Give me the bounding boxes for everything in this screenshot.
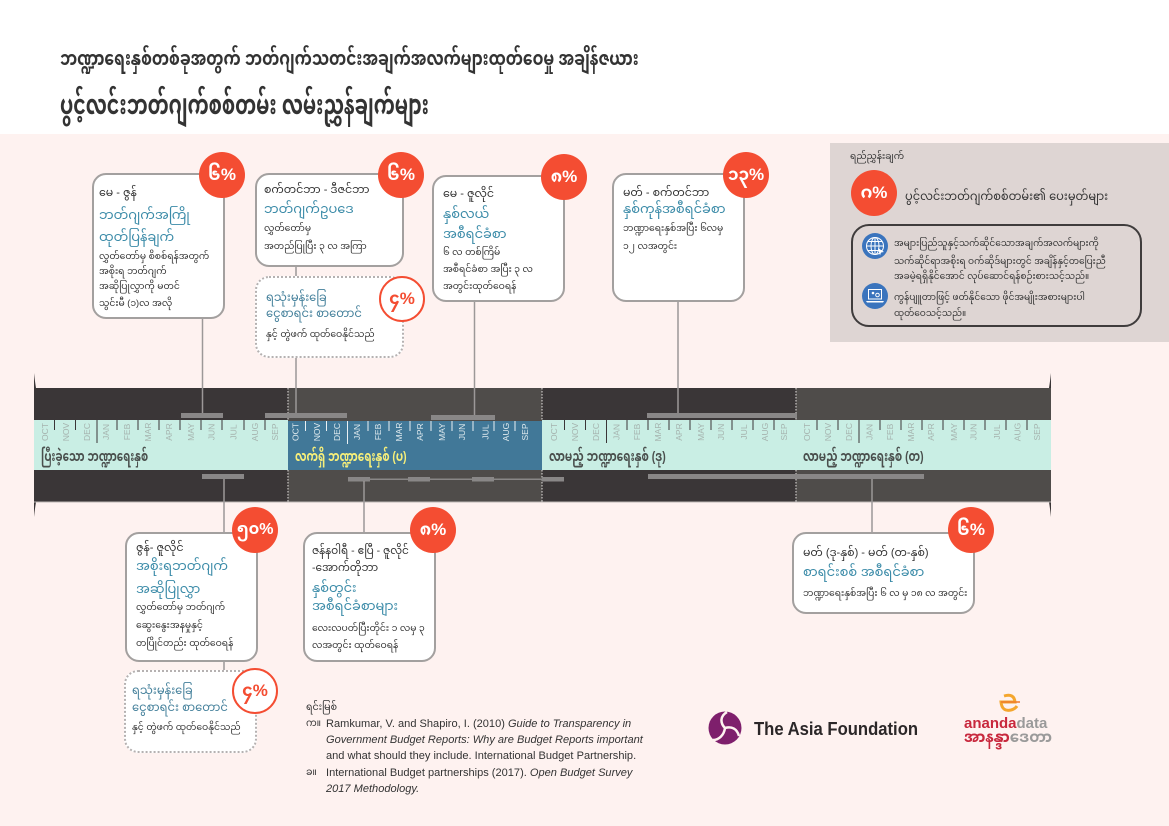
month labels: next year: JUN [716, 424, 726, 440]
card 4 heading: နှစ်ကုန်အစီရင်ခံစာ [623, 201, 726, 216]
card 6 date: ဇန်နဝါရီ - ဧပြီ - ဇူလိုင် [312, 545, 409, 557]
month labels: previous year: DEC [82, 423, 92, 441]
title [60, 45, 639, 128]
card 5 heading: အဆိုပြုလွှာ [136, 581, 200, 596]
card 3 heading [443, 205, 507, 244]
card 1 body [99, 250, 209, 310]
dashed card 1 heading [266, 289, 362, 322]
source two [306, 767, 633, 795]
month labels: following year: JUL [992, 424, 1002, 440]
card 2 body: လွှတ်တော်မှ [264, 223, 311, 233]
legend score label: ပွင့်လင်းဘတ်ဂျက်စစ်တမ်း၏ ပေးမှတ်များ [905, 191, 1108, 203]
month labels: following year: MAY [949, 423, 959, 441]
month labels: previous year: JAN [101, 424, 111, 440]
legend note one: အခမဲ့ရရှိနိုင်အောင် လုပ်ဆောင်ရန်စဉ်းစားသင့်သည်။ [894, 271, 1089, 281]
card: budget law [255, 173, 404, 267]
legend score circle: ဂ% [861, 183, 887, 202]
dashed card 2 body: နှင့် တွဲဖက် ထုတ်ဝေနိုင်သည် [132, 722, 241, 732]
card 4 body: ၁၂ လအတွင်း [623, 241, 677, 251]
title: ဘဏ္ဍာရေးနှစ်တစ်ခုအတွက် ဘတ်ဂျက်သတင်းအချက်အလက်များထုတ်ဝေမှု အချိန်ဇယား [60, 48, 639, 70]
month labels: current year [291, 422, 530, 441]
logo: The Asia Foundation [708, 712, 918, 744]
score: mid-year report: ၈% [551, 167, 577, 186]
month labels: next year: JAN [612, 424, 622, 440]
score: budget law [378, 152, 424, 198]
month labels: following year: MAR [906, 423, 916, 441]
card 6 heading: နှစ်တွင်း [312, 580, 357, 595]
next fiscal year band [542, 420, 796, 470]
month labels: next year: FEB [632, 423, 642, 440]
month labels: following year [802, 422, 1042, 441]
score: executive budget proposal: ၅၀% [236, 521, 274, 538]
card 4 date: မတ် - စက်တင်ဘာ [623, 187, 709, 199]
month labels: previous year: AUG [250, 423, 260, 441]
logo swirl [999, 694, 1020, 712]
month labels: following year: AUG [1012, 423, 1022, 441]
score: budget law: ၆% [387, 165, 415, 184]
year labels: လာမည့် ဘဏ္ဍာရေးနှစ် (တ) [803, 445, 924, 469]
score: in-year reports [410, 507, 456, 553]
month labels: current year: FEB [373, 423, 383, 440]
card: year-end report [612, 173, 745, 302]
month labels: current year: JAN [352, 424, 362, 440]
score: pre-budget statement: ၆% [208, 165, 236, 184]
card 6 heading: အစီရင်ခံစာများ [312, 598, 398, 613]
dashed card 1 heading: ငွေစာရင်း စာတောင် [266, 308, 362, 320]
year labels: လာမည့် ဘဏ္ဍာရေးနှစ် (ဒု) [549, 445, 666, 469]
dashed card 2 heading [132, 682, 228, 716]
card 5 date: ဇွန်- ဇူလိုင် [136, 542, 184, 554]
month labels: previous year: MAR [143, 423, 153, 441]
card 3 body: အစီရင်ခံစာ အပြီး ၃ လ [443, 264, 533, 274]
month labels: current year: JUN [457, 424, 467, 440]
source two: 2017 Methodology. [326, 783, 419, 795]
month labels: previous year: MAY [186, 423, 196, 441]
month labels: following year: FEB [885, 423, 895, 440]
card 1 heading [99, 206, 190, 247]
legend note two: ကွန်ပျူတာဖြင့် ဖတ်နိုင်သော ဖိုင်အမျိုးအစားများပါ [894, 292, 1085, 302]
logo wordmark [964, 715, 1052, 750]
card 1 body: သွင်းမီ (၁)လ အလို [99, 298, 172, 308]
score: estimates with budget law [379, 276, 425, 322]
card 5 body: ဆွေးနွေးအနမှုနှင့် [136, 620, 203, 630]
legend score circle [851, 170, 897, 216]
card 3 body [443, 246, 533, 294]
month labels: current year: MAR [394, 423, 404, 441]
score: audit report: ၆% [957, 520, 985, 539]
card 7 date: မတ် (ဒု-နှစ်) - မတ် (တ-နှစ်) [803, 547, 929, 559]
logo: ananda data [964, 694, 1052, 750]
month labels: next year: OCT [549, 423, 559, 441]
legend note one: သက်ဆိုင်ရာအစိုးရ ဝက်ဆိုဒ်များတွင် အချိန်နှင့်တပြေးညီ [894, 256, 1106, 266]
month labels: current year: APR [415, 423, 425, 441]
card: mid-year report [432, 175, 565, 302]
card 5 heading [136, 557, 228, 599]
card 3 body: အတွင်းထုတ်ဝေရန် [443, 281, 516, 291]
logo wordmark: anandadata [964, 715, 1047, 732]
card 1 date: မေ - ဇွန် [99, 187, 137, 199]
source one: Ramkumar, V. and Shapiro, I. (2010) Guide to Transparency in [326, 718, 631, 730]
card 3 date: မေ - ဇူလိုင် [443, 188, 494, 200]
card 5 body [136, 601, 233, 650]
card 2 date: စက်တင်ဘာ - ဒီဇင်ဘာ [264, 184, 370, 196]
year labels: ပြီးခဲ့သော ဘဏ္ဍာရေးနှစ် [41, 445, 148, 469]
score: mid-year report [541, 154, 587, 200]
legend note one [894, 236, 1106, 284]
dashed card 2 heading: ငွေစာရင်း စာတောင် [132, 702, 228, 714]
card 5 body: တပြိုင်တည်း ထုတ်ဝေရန် [136, 638, 233, 648]
timeline dark bands [34, 373, 1051, 517]
icon: globe [862, 233, 888, 259]
previous fiscal year band [34, 420, 288, 470]
current fiscal year band [288, 421, 542, 470]
card 3 body: ၆ လ တစ်ကြိမ် [443, 247, 500, 257]
sources [306, 700, 644, 795]
month labels: current year: NOV [312, 422, 322, 441]
card 7 heading: စာရင်းစစ် အစီရင်ခံစာ [803, 564, 924, 579]
month labels: previous year: JUN [206, 424, 216, 440]
score: year-end report: ၁၃% [728, 165, 764, 184]
card 3 heading: နှစ်လယ် [443, 206, 489, 221]
month labels: previous year: OCT [40, 423, 50, 441]
card 5 body: လွှတ်တော်မှ ဘတ်ဂျက် [136, 602, 225, 612]
dashed card 2 heading: ရသုံးမှန်းခြေ [132, 685, 193, 697]
dashed card 1 heading: ရသုံးမှန်းခြေ [266, 292, 327, 304]
card 6 date [312, 542, 409, 576]
legend heading: ရည်ညွှန်းချက် [850, 151, 904, 161]
source one: Government Budget Reports: Why are Budget Reports important [326, 734, 643, 746]
card 3 heading: အစီရင်ခံစာ [443, 226, 507, 241]
card 6 heading [312, 579, 398, 616]
card 2 body: အတည်ပြုပြီး ၃ လ အကြာ [264, 241, 367, 251]
card 1 body: လွှတ်တော်မှ စိစစ်ရန်အတွက် [99, 251, 209, 261]
month labels: current year: SEP [520, 423, 530, 441]
release windows below the timeline [202, 474, 924, 482]
logo wordmark: The Asia Foundation [754, 718, 918, 739]
score: estimates with budget law: ၄% [389, 289, 415, 308]
sources heading: ရင်းမြစ် [306, 702, 337, 713]
panel: legend [830, 143, 1169, 342]
score: in-year reports: ၈% [420, 520, 446, 539]
month labels: next year [549, 422, 789, 441]
card 6 body: လေးလပတ်ပြီးတိုင်း ၁ လမှ ၃ [312, 623, 425, 633]
score: year-end report [723, 152, 769, 198]
legend note one: အများပြည်သူနှင့်သက်ဆိုင်သောအချက်အလက်များကို [894, 238, 1099, 248]
dashed card 1 body: နှင့် တွဲဖက် ထုတ်ဝေနိုင်သည် [266, 329, 375, 339]
month labels: previous year: FEB [122, 423, 132, 440]
score: estimates with proposal [232, 668, 278, 714]
legend note two [894, 290, 1085, 320]
card 6 body [312, 622, 425, 652]
month labels: next year: MAY [696, 423, 706, 441]
title: ပွင့်လင်းဘတ်ဂျက်စစ်တမ်း လမ်းညွှန်ချက်များ [60, 89, 429, 120]
source two: International Budget partnerships (2017). Open Budget Survey [326, 767, 632, 779]
source one: and what should they include. International Budget Partnership. [326, 750, 636, 762]
month labels: following year: NOV [823, 422, 833, 441]
month labels: next year: AUG [760, 423, 770, 441]
month labels: following year: APR [926, 423, 936, 441]
month labels: next year: APR [674, 423, 684, 441]
month labels: following year: DEC [844, 423, 854, 441]
card 7 body: ဘဏ္ဍာရေးနှစ်အပြီး ၆ လ မှ ၁၈ လ အတွင်း [803, 588, 967, 598]
month labels: previous year [40, 422, 280, 441]
month labels: following year: JAN [864, 424, 874, 440]
card 1 heading: ဘတ်ဂျက်အကြို [99, 207, 190, 222]
month labels: current year: DEC [332, 423, 342, 441]
month labels: previous year: SEP [270, 423, 280, 441]
score: pre-budget statement [199, 152, 245, 198]
year labels [41, 445, 924, 469]
month labels: current year: AUG [501, 423, 511, 441]
card: pre-budget statement [92, 173, 225, 319]
score: executive budget proposal [232, 507, 278, 553]
card 1 heading: ထုတ်ပြန်ချက် [99, 229, 174, 244]
month ticks [54, 420, 1027, 444]
release windows above the timeline [181, 413, 797, 420]
source one: က။ [306, 718, 321, 729]
month labels: following year: SEP [1032, 423, 1042, 441]
year dividers [288, 388, 796, 502]
card: in-year reports [303, 532, 436, 662]
card 5 heading: အစိုးရဘတ်ဂျက် [136, 558, 228, 573]
month labels: current year: JUL [480, 424, 490, 440]
legend note box [851, 224, 1142, 327]
card: estimates with budget law [255, 276, 404, 358]
month labels: next year: JUL [739, 424, 749, 440]
icon: laptop [862, 283, 888, 309]
logo mark [708, 712, 742, 744]
logo wordmark: အာနန္ဒာဒေတာ [964, 729, 1052, 746]
source one [306, 718, 644, 762]
card 2 body [264, 222, 367, 254]
following fiscal year band [796, 420, 1051, 470]
timeline [34, 373, 1051, 517]
year labels: လက်ရှိ ဘဏ္ဍာရေးနှစ် (ပ) [295, 445, 407, 469]
month labels: following year: JUN [968, 424, 978, 440]
card 4 body [623, 222, 723, 254]
month labels: next year: SEP [779, 423, 789, 441]
month labels: next year: NOV [570, 422, 580, 441]
legend note two: ထုတ်ဝေသင့်သည်။ [894, 308, 966, 318]
score: audit report [948, 507, 994, 553]
month labels: previous year: NOV [61, 422, 71, 441]
card 6 body: လအတွင်း ထုတ်ဝေရန် [312, 640, 398, 650]
month labels: next year: MAR [653, 423, 663, 441]
source two: ခ။ [306, 767, 317, 778]
score: estimates with proposal: ၄% [242, 681, 268, 700]
month labels: current year: OCT [291, 423, 301, 441]
month labels: next year: DEC [591, 423, 601, 441]
month labels: following year: OCT [802, 423, 812, 441]
card: estimates with proposal [124, 670, 257, 753]
card 6 date: -အောက်တိုဘာ [312, 562, 378, 574]
month labels: previous year: APR [164, 423, 174, 441]
card 1 body: အစိုးရ ဘတ်ဂျက် [99, 266, 167, 276]
card 4 body: ဘဏ္ဍာရေးနှစ်အပြီး ၆လမှ [623, 223, 723, 233]
card 2 heading: ဘတ်ဂျက်ဥပဒေ [264, 201, 354, 216]
month labels: current year: MAY [437, 423, 447, 441]
card: audit report [792, 532, 975, 614]
card 1 body: အဆိုပြုလွှာကို မတင် [99, 281, 180, 291]
card: executive budget proposal [125, 532, 258, 662]
month labels: previous year: JUL [228, 424, 238, 440]
